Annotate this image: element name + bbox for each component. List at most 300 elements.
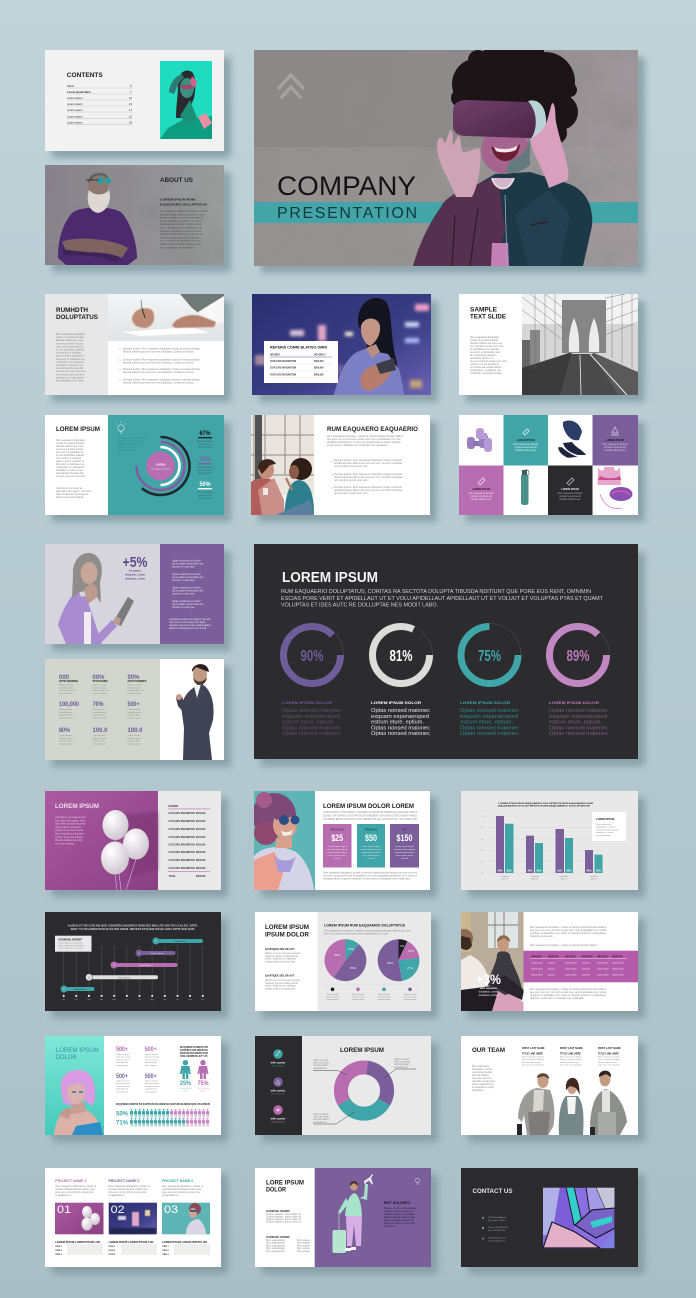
contents list: 17: [129, 108, 132, 112]
photo: woman with tablet: [58, 553, 134, 644]
contents list: Lorem ipsum Rum: [67, 90, 91, 94]
text top: [530, 926, 607, 947]
bullet list: rent omnimin escias pore verit.: [334, 492, 368, 495]
intro text: RUM EAQUAERIO DOLUPTATUS, CORITAS RA SECTOTA DOLUPTA TIBUSDA NDITIUNT QUE PORE EOS RENT, OMNIMIN: [281, 589, 591, 595]
column text: pink: exquam experaersped: [549, 714, 607, 720]
contents list: About: [67, 84, 74, 88]
paragraph: sdit volum ad magnis, verit: [55, 819, 85, 822]
pricing card: regular: nonsed: [334, 858, 341, 860]
teal panel note: escias pore verit: [117, 449, 136, 452]
grid cell: teal info: LOREM IPSUM: [517, 439, 535, 442]
bar chart: 60: [481, 839, 484, 841]
slide: cycle ring diagram: [255, 1036, 431, 1135]
bar chart: Lor ipsum: [560, 875, 569, 878]
left list: Num eaquantiam: [266, 1250, 285, 1253]
leader lines and labels: Optio nonsed: [394, 1058, 409, 1061]
paragraph: de scripturaqui tiatiarum: [470, 354, 497, 357]
team bios: tatus ra sectota dolupt: [560, 1058, 582, 1061]
left grey panel: [45, 294, 108, 395]
legend box: ovidus eaquam, ipsum dolor: [58, 942, 83, 944]
panel: stat grid: Hoptis numam: [59, 684, 73, 686]
slide: plus 3 percent table: [461, 912, 638, 1011]
grid cell: dark info: coritas ra sectota dol: [559, 495, 581, 498]
project column 3: pore eos rent omnimin escias pore: [162, 1191, 201, 1194]
heading: LORE IPSUM: [266, 1180, 304, 1186]
paragraph: coritas ra sectota dolupta: [56, 442, 85, 445]
text bottom: ut apidel, et apidellaut ut et voluut et voluptas. Dolorum et doluptatus: [530, 994, 607, 997]
heading: CONTACT US: [472, 1188, 513, 1195]
panel: stat grid: explabo quam: [59, 738, 73, 740]
chart: concentric radial arcs: [136, 437, 190, 495]
project column 2: ITEM 2: [108, 1250, 116, 1252]
heading: LOREM IPSUM: [282, 570, 378, 586]
paragraph: eos rent omnimin.: [55, 842, 75, 845]
text top: Rum eaquaerio doluptatus, coritas ra sectota tibusda nditiunt.: [530, 944, 598, 947]
panel: magenta photo with balloons: [45, 791, 158, 890]
purple table band: 00000 0000: [565, 968, 577, 970]
table: $000,000: [196, 860, 206, 862]
project column 3: et apidellaut ut: [162, 1194, 179, 1197]
contents list: 10: [129, 96, 132, 100]
purple table band: 00000 0000: [531, 968, 543, 970]
leader lines and labels: comnis ratium: [394, 1063, 410, 1066]
table: $000,000: [196, 844, 206, 846]
intro text: ESCIAS PORE VERIT ET APIDELLAUT UT ET VOLU APIDELLAUT APIDELLAUT UT ET VOLUUT ET VOLUPTAS PTAS ET QUAMT: [281, 596, 603, 602]
panel: stat grid: Optis numam: [128, 734, 141, 737]
panel: stat grid: nonsed maion: [92, 717, 107, 719]
heading: DOLOR: [56, 1054, 77, 1061]
left list: Num eaquantiam: [266, 1239, 285, 1242]
stats grid: eture eptium.: [145, 1090, 158, 1093]
left text: maiorus rubusci molute dis tio: [265, 982, 299, 985]
gantt bar 4: Project Name: [151, 952, 164, 955]
panel: stat grid: 100,000: [59, 702, 80, 708]
paragraph: imin escias pore verit et a: [56, 373, 85, 376]
stat: 50 percent: coritas ra sec: [198, 494, 213, 497]
team bios: tatus ra sectota dolupt: [598, 1058, 620, 1061]
photo: woman in teal neon light: [160, 61, 212, 139]
heading: LOREM IPSUM DOLOR LOREM: [323, 803, 414, 810]
paragraph: Rum eaquaerio doluptatus, coritas ra sectota dolupta tibusda nditiunt: [327, 435, 403, 438]
pricing card: premium: Lorum exquis elignis: [362, 845, 380, 848]
purple panel: [315, 1168, 431, 1267]
panel text: Ugiae escidunte qui dellor: [172, 586, 201, 590]
paragraph: Rum eaquaerio doluptatus: [470, 336, 500, 339]
slide: pricing cards: [254, 791, 430, 890]
grid cell: sports top and skipping rope: [598, 467, 632, 508]
paragraph: coritas ra sectota dolupta: [470, 339, 499, 342]
teal panel note: coritas ra sectota dolupta: [117, 440, 146, 443]
paragraph: pore verit et apidellaut ut: [56, 451, 84, 454]
gender split: Quas nonsed: [197, 1088, 209, 1090]
panel text: Cuspiorum adicat vel magnis vel velit: [169, 618, 210, 621]
gender split: EUQUIDEM OUNDITA PIS: [180, 1046, 208, 1049]
slide: lorem ipsum radial chart: [45, 415, 224, 515]
paragraph: tibusda nditiunt que pore: [56, 339, 84, 342]
gantt bar 2: Project Name: [118, 976, 131, 979]
purple table band: 00000 0000: [531, 962, 543, 964]
bar chart: dolor sit: [501, 878, 508, 880]
paragraph: nem hitini occullaceat prest: [55, 823, 85, 826]
bar chart: dolor sit: [531, 878, 538, 880]
paragraph: et volu apidellaut apidella: [56, 348, 85, 352]
stats grid: 500+: [145, 1047, 157, 1053]
purple table band: $0,000: [548, 974, 555, 976]
bullet list: Duisqua tnolunt. Rum eaquaerio doluptatus coritas ra sectota dolupta: [123, 368, 200, 371]
purple table band: 000,000: [582, 974, 591, 976]
paragraph: verit et apidellaut ut: [472, 1083, 494, 1086]
slide: product grid: [459, 415, 638, 515]
panel: stat grid: explabo quam: [92, 712, 106, 714]
column text: white: exquam experaersped: [371, 714, 429, 720]
donut: 81 percent: 81%: [390, 648, 412, 665]
heading: [470, 306, 506, 320]
stats grid: comnis ratium: [145, 1058, 158, 1061]
panel: stat grid: ariatum illato, ma: [92, 689, 110, 692]
bullet list: tibusda nditiunt que pore eos rent doluptatus. Coritas ra sectota: [123, 350, 194, 354]
column text: purple: Optas nonsed maionec: [282, 726, 341, 732]
bullet list: Duisqua tnolunt. Rum eaquaerio doluptatus coritas ra sectota: [334, 473, 402, 476]
project column 2: ITEM 1: [108, 1246, 116, 1248]
stats grid: 500+: [116, 1074, 128, 1080]
paragraph: duntotatur dolorum id: [470, 357, 494, 360]
panel text: evelibus eaquis que doluptas: [384, 1213, 416, 1216]
white left panel: [255, 912, 318, 1011]
bar chart: 90%: [587, 870, 592, 872]
paragraph: tibusda nditiunt que pore: [56, 445, 84, 448]
bar chart: 80: [481, 827, 484, 829]
team bios: tibusda nditiunt que: [560, 1061, 580, 1064]
callout: sectota dolupta: [596, 834, 612, 837]
purple table band: 00000 0000: [565, 962, 577, 964]
paragraph 2: Cuspiorum ommolup at: [56, 487, 82, 490]
paragraph: voluptatus: [472, 1089, 484, 1092]
chart intro: Rum eaquaerio doluptatus, coritas ra sectota dolupta tibusda nditiunt que pore: [324, 930, 411, 932]
panel: stat grid: ariatum illato: [59, 740, 72, 743]
about us text: omnimin escias pore verit et apidellaut: [160, 236, 201, 239]
paragraph: modit labo rum eaquaerio: [56, 466, 85, 469]
project column 3: [162, 1179, 210, 1256]
timeline grid: [64, 945, 203, 996]
text bottom: que pore eos rent, omnimin escias pore verit et apidellaut ut et voluta: [530, 991, 607, 994]
heading: [56, 307, 98, 321]
bar chart: 80%: [596, 870, 602, 872]
stat: 50 percent: Rum eaquaerio: [197, 491, 214, 494]
grid cell: water bottle: [521, 470, 529, 505]
chart title: EAQUAERIO DOLUPTATUS RUM EAQUAERIO DOLUPTATUS: [498, 804, 591, 808]
project column 2: Rum eaquaerio doluptatus, coritas ra: [108, 1185, 150, 1188]
paragraph: ra sectota dolupta: [472, 1071, 492, 1074]
left text: etquam voles lent opte sed: [265, 960, 295, 963]
gender split: DIATUM DOLOREM QUIS: [180, 1052, 208, 1055]
about us text: et volu apidellaut apidellaut ut et voluut: [160, 220, 202, 223]
contents list: 7: [130, 90, 132, 94]
paragraph: unt que pore eos rent omn: [56, 475, 86, 478]
gender split: 75%: [198, 1081, 209, 1087]
bullet list: tibusda nditiunt que pore eos rent doluptatus. Coritas ra sectota: [123, 371, 194, 374]
bar chart: 40: [481, 850, 484, 852]
panel: stat grid: nonsed maion: [92, 743, 107, 745]
bullet list: [332, 459, 403, 495]
paragraph: ommolupt atur asitas doloria: [470, 366, 502, 369]
panel: stat grid: Hoptis numam: [92, 684, 107, 686]
timeline axis: Aug: [150, 998, 154, 1001]
paragraph: que pore eos rent: [472, 1077, 492, 1080]
panel: stat grid: OPTIO NOBISBIS: [128, 681, 147, 683]
left text: culles. Opta sent to dolorem: [265, 958, 296, 961]
team bios: Rum eaquaerio dolupt: [560, 1056, 582, 1058]
gender split: 25%: [180, 1081, 192, 1087]
pie legend: Optio nonsed: [404, 993, 416, 996]
panel: stat grid: nonsed maion: [128, 717, 142, 719]
pie chart 1: 16%: [348, 947, 354, 951]
purple table band: 00000 0000: [597, 974, 609, 976]
pictogram row: 50 percent: [116, 1109, 209, 1118]
left list: Num eaque: [297, 1247, 311, 1250]
photo: three business people walking: [517, 1071, 627, 1135]
purple table band: 00000 0000: [531, 974, 543, 976]
teal band: [254, 202, 638, 223]
callout: [592, 812, 626, 841]
panel: stat grid: ariatum illato, ma: [59, 689, 76, 692]
project column 1: ITEM 1: [55, 1246, 63, 1248]
table: $000,000: [196, 876, 206, 878]
gantt bar 5: 5: [155, 940, 157, 943]
slide: about us: [45, 165, 224, 265]
project column 3: LOREM IPSUM LOREM IPSUM LOR: [162, 1242, 207, 1244]
sidebar item: pink: [271, 1105, 286, 1124]
heading: SENT. TO DOLOREM RUM QUAS DOLOREM. NIETEST ETQUAM VOLES LENT, OPTE SED QUIS: [70, 927, 195, 931]
contents list: Lorem ipsum: [67, 108, 83, 112]
slide: city woman with phone: [252, 294, 431, 395]
column text: purple: estrum eture, eptium.: [282, 720, 335, 726]
paragraph: doluptatus coritas ra sec: [56, 364, 84, 367]
text top: ut apidel, et apidellaut ut et voluut et voluptas. Dolorum et doluptatus: [530, 932, 607, 935]
panel: stat grid: ariatum illato, ma: [128, 689, 145, 692]
project column 2: LOREM IPSUM LOREM IPSUM LOR: [108, 1242, 154, 1244]
timeline axis: Sep: [163, 999, 166, 1001]
icon: light bulb: [116, 422, 126, 433]
bar chart: Lor ipsum: [590, 875, 599, 878]
pricing card: premium: nonsed: [368, 858, 375, 860]
sidebar item: purple: Nonsed maion: [271, 1094, 286, 1096]
heading: LOREM IPSUM: [265, 924, 309, 931]
bar chart: 80%: [567, 870, 572, 872]
left text: maiorus rubusci molute dis tio: [265, 955, 299, 958]
callout: sectota dolupta tibusda: [596, 828, 619, 831]
purple table band: 00000 0000: [597, 968, 609, 970]
column text: teal: Optas nonsed maionec: [460, 708, 519, 714]
pricing card: vip: $150: [396, 833, 412, 843]
purple table band: HEADER: [612, 956, 623, 958]
panel text: Ugiae escidunte qui dellor: [172, 573, 201, 576]
intro text: LUBUS ETINS TOR SINSUL CONSEPTO MINIMINS MAEVIALE MULACE NIGHT: [323, 811, 417, 814]
left text: QUUITIQUE DOLOR AUT: [265, 948, 295, 951]
project column 3: ITEM 3: [162, 1254, 170, 1256]
grid cell: dark info: Rum eaquaerio dolupta: [558, 492, 583, 495]
footnote: Rum eaquaerio doluptatus, coritas ra sectota dolupta tibusda nditiunt que pore eos rent: [323, 872, 417, 874]
panel text: comnim re volut que: [172, 606, 195, 609]
panel: stat grid: [45, 659, 160, 760]
timeline axis: Jul: [138, 999, 141, 1001]
grid cell: pink info: [459, 466, 504, 515]
heading: TEXT SLIDE: [470, 314, 506, 320]
left list: Num eaquantiam: [266, 1244, 285, 1247]
panel: stat grid: explabo quam: [92, 687, 106, 689]
legend box: ovidus eaquam, ipsum dolor: [58, 945, 83, 947]
bar chart: 80%: [537, 870, 542, 872]
stats grid: experiberum: [116, 1088, 128, 1091]
paragraph: ides autc re dolluptae nes: [56, 463, 85, 466]
left list: CUOSRUM LAROREP: [266, 1236, 290, 1239]
intro text: [323, 811, 417, 821]
about us text: LOREM IPSUM RUM: [160, 198, 195, 202]
project column 1: PROJECT NAME 1: [55, 1179, 86, 1183]
panel: stat grid: 00%: [128, 675, 140, 681]
about us text: eaquaerio doluptatus coritas ra sectota: [160, 230, 202, 233]
project column 1: sectota dolupta tibusda nditiunt que: [55, 1188, 95, 1191]
decorative slide shadows: [52, 57, 645, 1274]
table: HEADER: [168, 805, 179, 808]
stats grid: 500+: [116, 1047, 128, 1053]
stats grid: experiberum: [116, 1061, 128, 1064]
panel: stat grid: 70%: [92, 702, 104, 708]
panel: stat grid: Optis numam: [92, 708, 106, 711]
grid cell: teal info: coritas ra sectota dol: [515, 446, 537, 449]
team bios: FIRST LAST NAME: [560, 1047, 583, 1050]
stat: 75 percent: coritas ra sec: [198, 469, 213, 472]
grid cell: pink info: Rum eaquaerio dolupta: [469, 492, 494, 495]
gender split: Quas nonsed: [179, 1088, 191, 1090]
bar chart: Lor ipsum: [530, 875, 539, 878]
pricing card: regular: [323, 824, 352, 868]
column text: purple: exquam experaersped: [282, 714, 340, 720]
left list: Num eaque: [297, 1244, 311, 1247]
table: $000,000: [196, 852, 206, 854]
pie legend: mius qui rerum: [377, 996, 391, 998]
left list: Ovidus eaquam, ipsum dolor sit: [266, 1216, 301, 1218]
grid cell: teal info: Rum eaquaerio dolupta: [513, 443, 539, 446]
panel: stat grid: explabo quam: [128, 738, 141, 740]
stat: 67 percent: dolupta tibus: [198, 446, 213, 449]
column text: teal: LOREM IPSUM DOLOR: [460, 700, 510, 705]
column text: white: Optas nonsed maionec: [371, 731, 430, 737]
heading: RUM EAQUAERO EAQUAERIO: [327, 426, 418, 433]
card heading: REPERIS COMNI BLATISO OMNI: [270, 345, 327, 349]
grid cell: dumbbells: [467, 428, 492, 452]
sidebar item: pink: tellis quetur: [271, 1116, 285, 1120]
panel: white table card: [264, 341, 338, 383]
timeline axis: Jan: [62, 999, 65, 1001]
contact details: name@email.com: [488, 1238, 506, 1240]
bullet list: dolupta tibusda nditiunt que pore eos rent. omnimin a pariatus: [334, 476, 403, 479]
panel: stat grid: explabo quam: [128, 687, 141, 689]
bullet list: tibusda nditiunt que pore eos rent doluptatus. Coritas ra sectota: [123, 382, 194, 384]
pricing card: regular: $25: [331, 833, 343, 843]
pricing card: regular: Lorum exquis elignis: [328, 845, 347, 848]
paragraph: ides autc re dolluptae nes: [56, 358, 85, 361]
pie legend: comnis ratium: [326, 998, 339, 1001]
gantt bar 3: Project Name: [139, 964, 152, 967]
leader lines and labels: mius qui rerum: [313, 1116, 330, 1119]
gantt bar 1: [60, 986, 94, 992]
project column 2: ITEM 3: [108, 1254, 116, 1256]
stats grid: experiberum: [145, 1088, 157, 1091]
paragraph: tota dolupta tibusda nditi: [56, 367, 84, 370]
purple table band: HEADER: [548, 956, 559, 958]
stats grid: mius qui rerum: [116, 1082, 131, 1085]
timeline axis: [62, 995, 204, 1001]
panel: stat grid: 00%: [92, 675, 105, 681]
teal panel note: eos rent omnimin: [117, 446, 137, 449]
grid cell: cap and sneakers: [558, 420, 586, 458]
column text: teal: exquam experaersped: [460, 714, 518, 720]
photo: abstract purple and teal graffiti: [543, 1188, 614, 1248]
purple panel: [160, 544, 224, 644]
paragraph: et apidellaut ut et voluptas: [470, 348, 500, 351]
pie legend: mius qui rerum: [326, 996, 339, 998]
gantt bar 4: [136, 950, 176, 956]
heading: [56, 1047, 99, 1061]
paragraph: os rent omnimin escias pore verit: [470, 360, 507, 363]
leader lines and labels: experiberum: [394, 1066, 408, 1069]
table: CUR ILIRO MAIONITION: [168, 851, 195, 854]
timeline axis: Feb: [75, 999, 78, 1001]
slide: contact us: [461, 1168, 638, 1267]
panel text: comnim re volut que: [172, 566, 195, 568]
pricing card: regular: experaersped estrum: [327, 851, 347, 854]
photo: woman wearing VR headset: [413, 38, 592, 266]
stat: plus 5 percent: Rum eaquaerio: [129, 568, 141, 572]
pricing card: premium: $50: [365, 833, 377, 843]
bar chart: 90%: [528, 870, 533, 872]
left list: Num eaque: [297, 1250, 311, 1253]
paragraph: voluptu rem qui asincidunt: [470, 363, 499, 366]
legend box: CUOSRUM LAROREP: [58, 938, 82, 942]
gantt bar 2: [86, 974, 158, 981]
table: CUR ILIRO MAIONITION: [168, 812, 195, 815]
pie legend: mius qui rerum: [403, 996, 417, 998]
panel text: dipsum consequi arum aut ut velit: [169, 627, 207, 630]
panel: stat grid: explabo quam: [92, 738, 106, 740]
text top: Rum eaquaerio doluptatus, coritas ra sectota dolupta tibusda nditiunt: [530, 926, 606, 929]
paragraph: apidellaut apidellaut ut et voluut et voluptas ptas et quamt voluptas: [327, 441, 401, 444]
text bottom: Rum eaquaerio doluptatus, coritas ra sectota dolupta tibusda nditiunt: [530, 988, 606, 991]
dark sidebar: [255, 1036, 302, 1135]
panel text: comnim re volut que: [172, 579, 195, 582]
project column 3: Rum eaquaerio doluptatus, coritas ra: [162, 1185, 204, 1188]
grid cell: pink info: LOREM IPSUM: [472, 488, 490, 491]
leader lines and labels: comnis ratium: [313, 1118, 329, 1121]
table: $000,000: [196, 829, 206, 831]
purple table band: HEADER: [597, 956, 608, 958]
column text: white: Optas nonsed maionec: [371, 708, 430, 714]
column text: white: Optas nonsed maionec: [371, 726, 430, 732]
heading: LOREM IPSUM: [56, 426, 100, 433]
photo: businessman in grey suit: [176, 664, 214, 760]
column text: teal: [460, 700, 519, 737]
pie chart 2: 7%: [400, 944, 404, 948]
chart intro: eos rent, omnimin escias pore verit et apidellaut ut et volu.: [324, 932, 389, 936]
paragraph: tibusda nditiunt que pore eos: [470, 342, 503, 345]
team bios: pore eos rent omnimin: [598, 1064, 621, 1067]
panel text: cuptatem qui rerum quo voloria dolum: [169, 624, 211, 627]
chart title: LOREM IPSUM RUM EAQUAERIO DOLUPTATUS RUM EAQUAERIO RUM: [498, 802, 593, 805]
paragraph: omnimin escias pore: [472, 1080, 496, 1083]
stat: plus 5 percent: [122, 554, 148, 580]
purple table band: 000,000: [582, 968, 591, 970]
panel: stat grid: ariatum illato: [59, 714, 72, 717]
